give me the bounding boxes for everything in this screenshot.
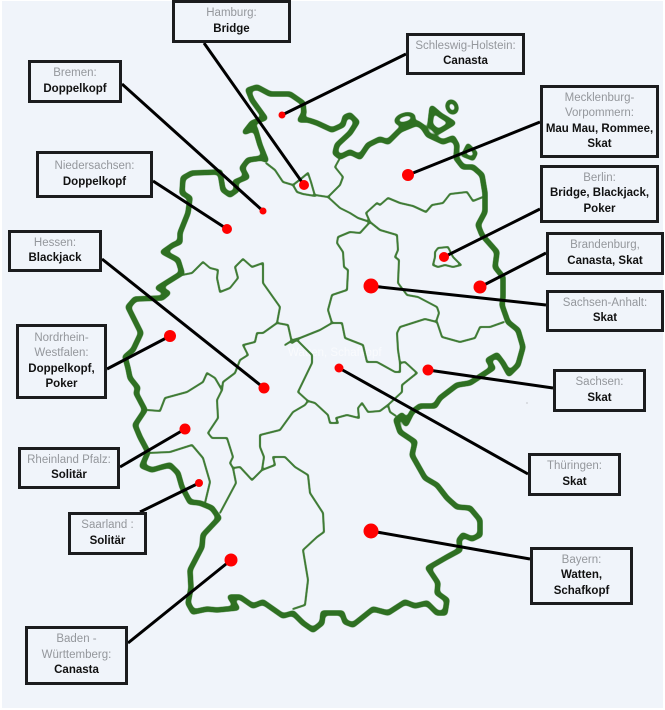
faint stray text on map: Watten, Schafkopf <box>288 347 382 359</box>
label: Sachsen-Anhalt: Skat <box>593 312 617 324</box>
leader lines <box>102 43 553 643</box>
label: Hamburg: Bridge <box>213 22 250 34</box>
label: Schleswig-Holstein: Schleswig-Holstein: <box>415 40 516 52</box>
label: Thüringen <box>528 453 621 496</box>
label: Nordrhein-Westfalen <box>16 324 107 399</box>
label: Brandenburg: Canasta, Skat <box>567 254 643 266</box>
label: Mecklenburg-Vorpommern: Mecklenburg- <box>565 92 634 104</box>
label: Niedersachsen: Niedersachsen: <box>55 160 134 172</box>
label: Berlin: Bridge, Blackjack, <box>550 187 649 199</box>
label: Nordrhein-Westfalen: Doppelkopf, <box>28 362 95 374</box>
label: Mecklenburg-Vorpommern <box>540 85 659 158</box>
label: Bayern: Watten, <box>561 569 602 581</box>
label: Saarland: Solitär <box>90 534 125 546</box>
label: Berlin: Poker <box>584 203 615 215</box>
label: Brandenburg: Brandenburg, <box>570 239 640 251</box>
label: Berlin: Berlin: <box>583 172 616 184</box>
label: Mecklenburg-Vorpommern: Skat <box>587 138 612 150</box>
label: Thüringen: Skat <box>562 476 587 488</box>
label: Berlin <box>540 165 659 223</box>
label: Mecklenburg-Vorpommern: Vorpommern: <box>565 107 634 119</box>
label: Bremen: Doppelkopf <box>43 82 107 94</box>
label: Rheinland Pfalz: Rheinland Pfalz: <box>27 454 111 466</box>
label: Niedersachsen: Doppelkopf <box>63 176 126 188</box>
label: Baden-Württemberg <box>25 626 128 685</box>
label: Baden-Württemberg: Canasta <box>54 664 99 676</box>
label: Hessen <box>8 230 102 272</box>
label: Sachsen <box>553 369 646 412</box>
label: Nordrhein-Westfalen: Nordrhein- <box>34 332 89 344</box>
label: Nordrhein-Westfalen: Poker <box>46 378 77 390</box>
label: Bayern: Schafkopf <box>554 585 609 597</box>
label: Bremen <box>28 60 122 103</box>
label: Hessen: Blackjack <box>28 252 82 264</box>
label: Rheinland Pfalz: Solitär <box>51 469 87 481</box>
label: Mecklenburg-Vorpommern: Mau Mau, Rommee, <box>546 122 653 134</box>
label: Saarland <box>68 512 147 555</box>
label: Niedersachsen <box>36 151 153 198</box>
label: Hessen: Hessen: <box>34 237 76 249</box>
label: Sachsen-Anhalt <box>546 290 664 332</box>
label: Schleswig-Holstein <box>406 33 525 75</box>
label: Saarland: Saarland : <box>81 519 134 531</box>
label: Schleswig-Holstein: Canasta <box>443 55 488 67</box>
red location dots <box>164 112 486 566</box>
state borders <box>147 158 504 609</box>
label: Bayern <box>530 547 633 605</box>
label: Rheinland Pfalz <box>18 447 120 489</box>
label: Thüringen: Thüringen: <box>547 460 602 472</box>
label: Bayern: Bayern: <box>562 554 601 566</box>
national border <box>125 87 523 630</box>
label: Bremen: Bremen: <box>53 67 97 79</box>
label: Sachsen: Skat <box>587 392 612 404</box>
label: Brandenburg <box>546 232 664 275</box>
label: Baden-Württemberg: Baden - <box>56 633 97 645</box>
label: Baden-Württemberg: Württemberg: <box>42 649 111 661</box>
label: Nordrhein-Westfalen: Westfalen: <box>34 347 89 359</box>
label: Hamburg: Hamburg: <box>206 7 257 19</box>
label: Sachsen: Sachsen: <box>576 376 623 388</box>
label: Sachsen-Anhalt: Sachsen-Anhalt: <box>563 297 647 309</box>
label: Hamburg <box>172 0 291 43</box>
